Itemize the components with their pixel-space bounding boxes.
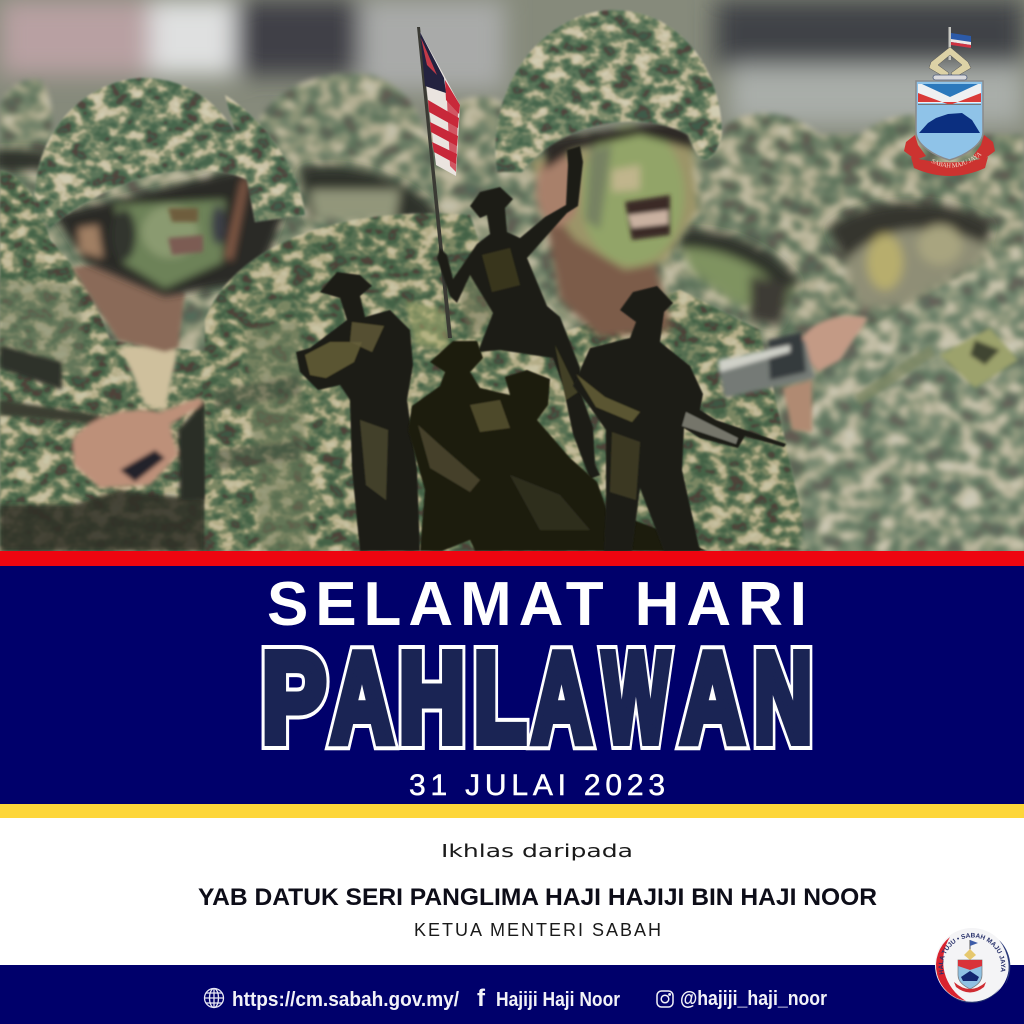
statue: four bronze soldiers — [296, 27, 786, 551]
left soldier straps and skin — [0, 262, 208, 551]
heading: Pahlawan: N — [754, 627, 812, 768]
heading: Pahlawan: A — [681, 627, 744, 768]
crest ribbon: SABAH MAJU JAYA — [931, 152, 982, 168]
heading: Pahlawan: L — [474, 627, 526, 768]
text: chief minister name: YAB DATUK SERI PANGLIMA HAJI HAJIJI BIN HAJI NOOR — [198, 884, 877, 911]
heading: Pahlawan: W — [603, 627, 669, 768]
centre soldier helmet — [495, 10, 722, 172]
banner: navy title panel — [0, 566, 1024, 804]
badge: Hala Tuju Sabah Maju Jaya — [935, 928, 1010, 1003]
icon: globe — [204, 988, 224, 1008]
photo: soldiers background — [0, 0, 1024, 551]
badge: Hala Tuju Sabah Maju Jaya: HALA TUJU • SABAH MAJU JAYA — [938, 932, 1006, 974]
crest flag — [948, 27, 971, 60]
heading: Pahlawan — [262, 627, 812, 768]
centre soldier neck and face — [530, 118, 698, 338]
footer bar — [0, 965, 1024, 1024]
icon: instagram — [657, 991, 673, 1007]
left soldier helmet and face — [34, 78, 305, 296]
sender panel — [0, 818, 1024, 965]
heading: Pahlawan: A — [532, 627, 591, 768]
centre soldier body — [205, 213, 810, 551]
date: 31 JULAI 2023 — [409, 769, 665, 802]
crest shield — [916, 81, 983, 160]
heading: Pahlawan: W — [603, 627, 669, 768]
right soldier with rifle — [573, 286, 786, 551]
banner: red stripe — [0, 551, 1024, 566]
back row faces and shadows — [0, 150, 992, 325]
heading: Pahlawan: A — [331, 627, 393, 768]
crest ribbon — [904, 135, 995, 176]
link: facebook name: Hajiji Haji Noor — [496, 989, 620, 1011]
crest chain — [933, 75, 967, 80]
crouching soldier and fallen soldier — [408, 341, 707, 551]
icon: facebook: f — [477, 985, 486, 1012]
crest hands — [929, 47, 971, 78]
heading: Pahlawan: H — [399, 627, 465, 768]
link: website: https://cm.sabah.gov.my/ — [232, 989, 459, 1011]
text: chief minister title: KETUA MENTERI SABAH — [414, 920, 661, 940]
heading: Pahlawan: L — [474, 627, 526, 768]
heading: Pahlawan: A — [681, 627, 744, 768]
heading: Pahlawan: P — [262, 627, 326, 768]
link: instagram handle: @hajiji_haji_noor — [680, 988, 827, 1010]
heading: Pahlawan: P — [262, 627, 326, 768]
heading: Pahlawan: H — [399, 627, 465, 768]
heading: Pahlawan: N — [754, 627, 812, 768]
text: ikhlas daripada: Ikhlas daripada — [441, 841, 633, 862]
left soldier body — [0, 170, 215, 551]
heading: Pahlawan: A — [532, 627, 591, 768]
blurred crowd backdrop — [0, 0, 1024, 125]
soldier holding flag — [437, 146, 600, 479]
full bleed camouflage crowd — [0, 74, 1024, 551]
banner: yellow stripe — [0, 804, 1024, 818]
centre soldier vest shading — [213, 278, 490, 551]
heading: Pahlawan: A — [331, 627, 393, 768]
heading: Selamat Hari: SELAMAT HARI — [267, 570, 807, 639]
flag pole and Malaysian flag — [417, 27, 460, 338]
right soldier body and arm — [718, 248, 1024, 551]
left soldier — [296, 272, 420, 551]
crest: Sabah coat of arms — [904, 27, 995, 176]
